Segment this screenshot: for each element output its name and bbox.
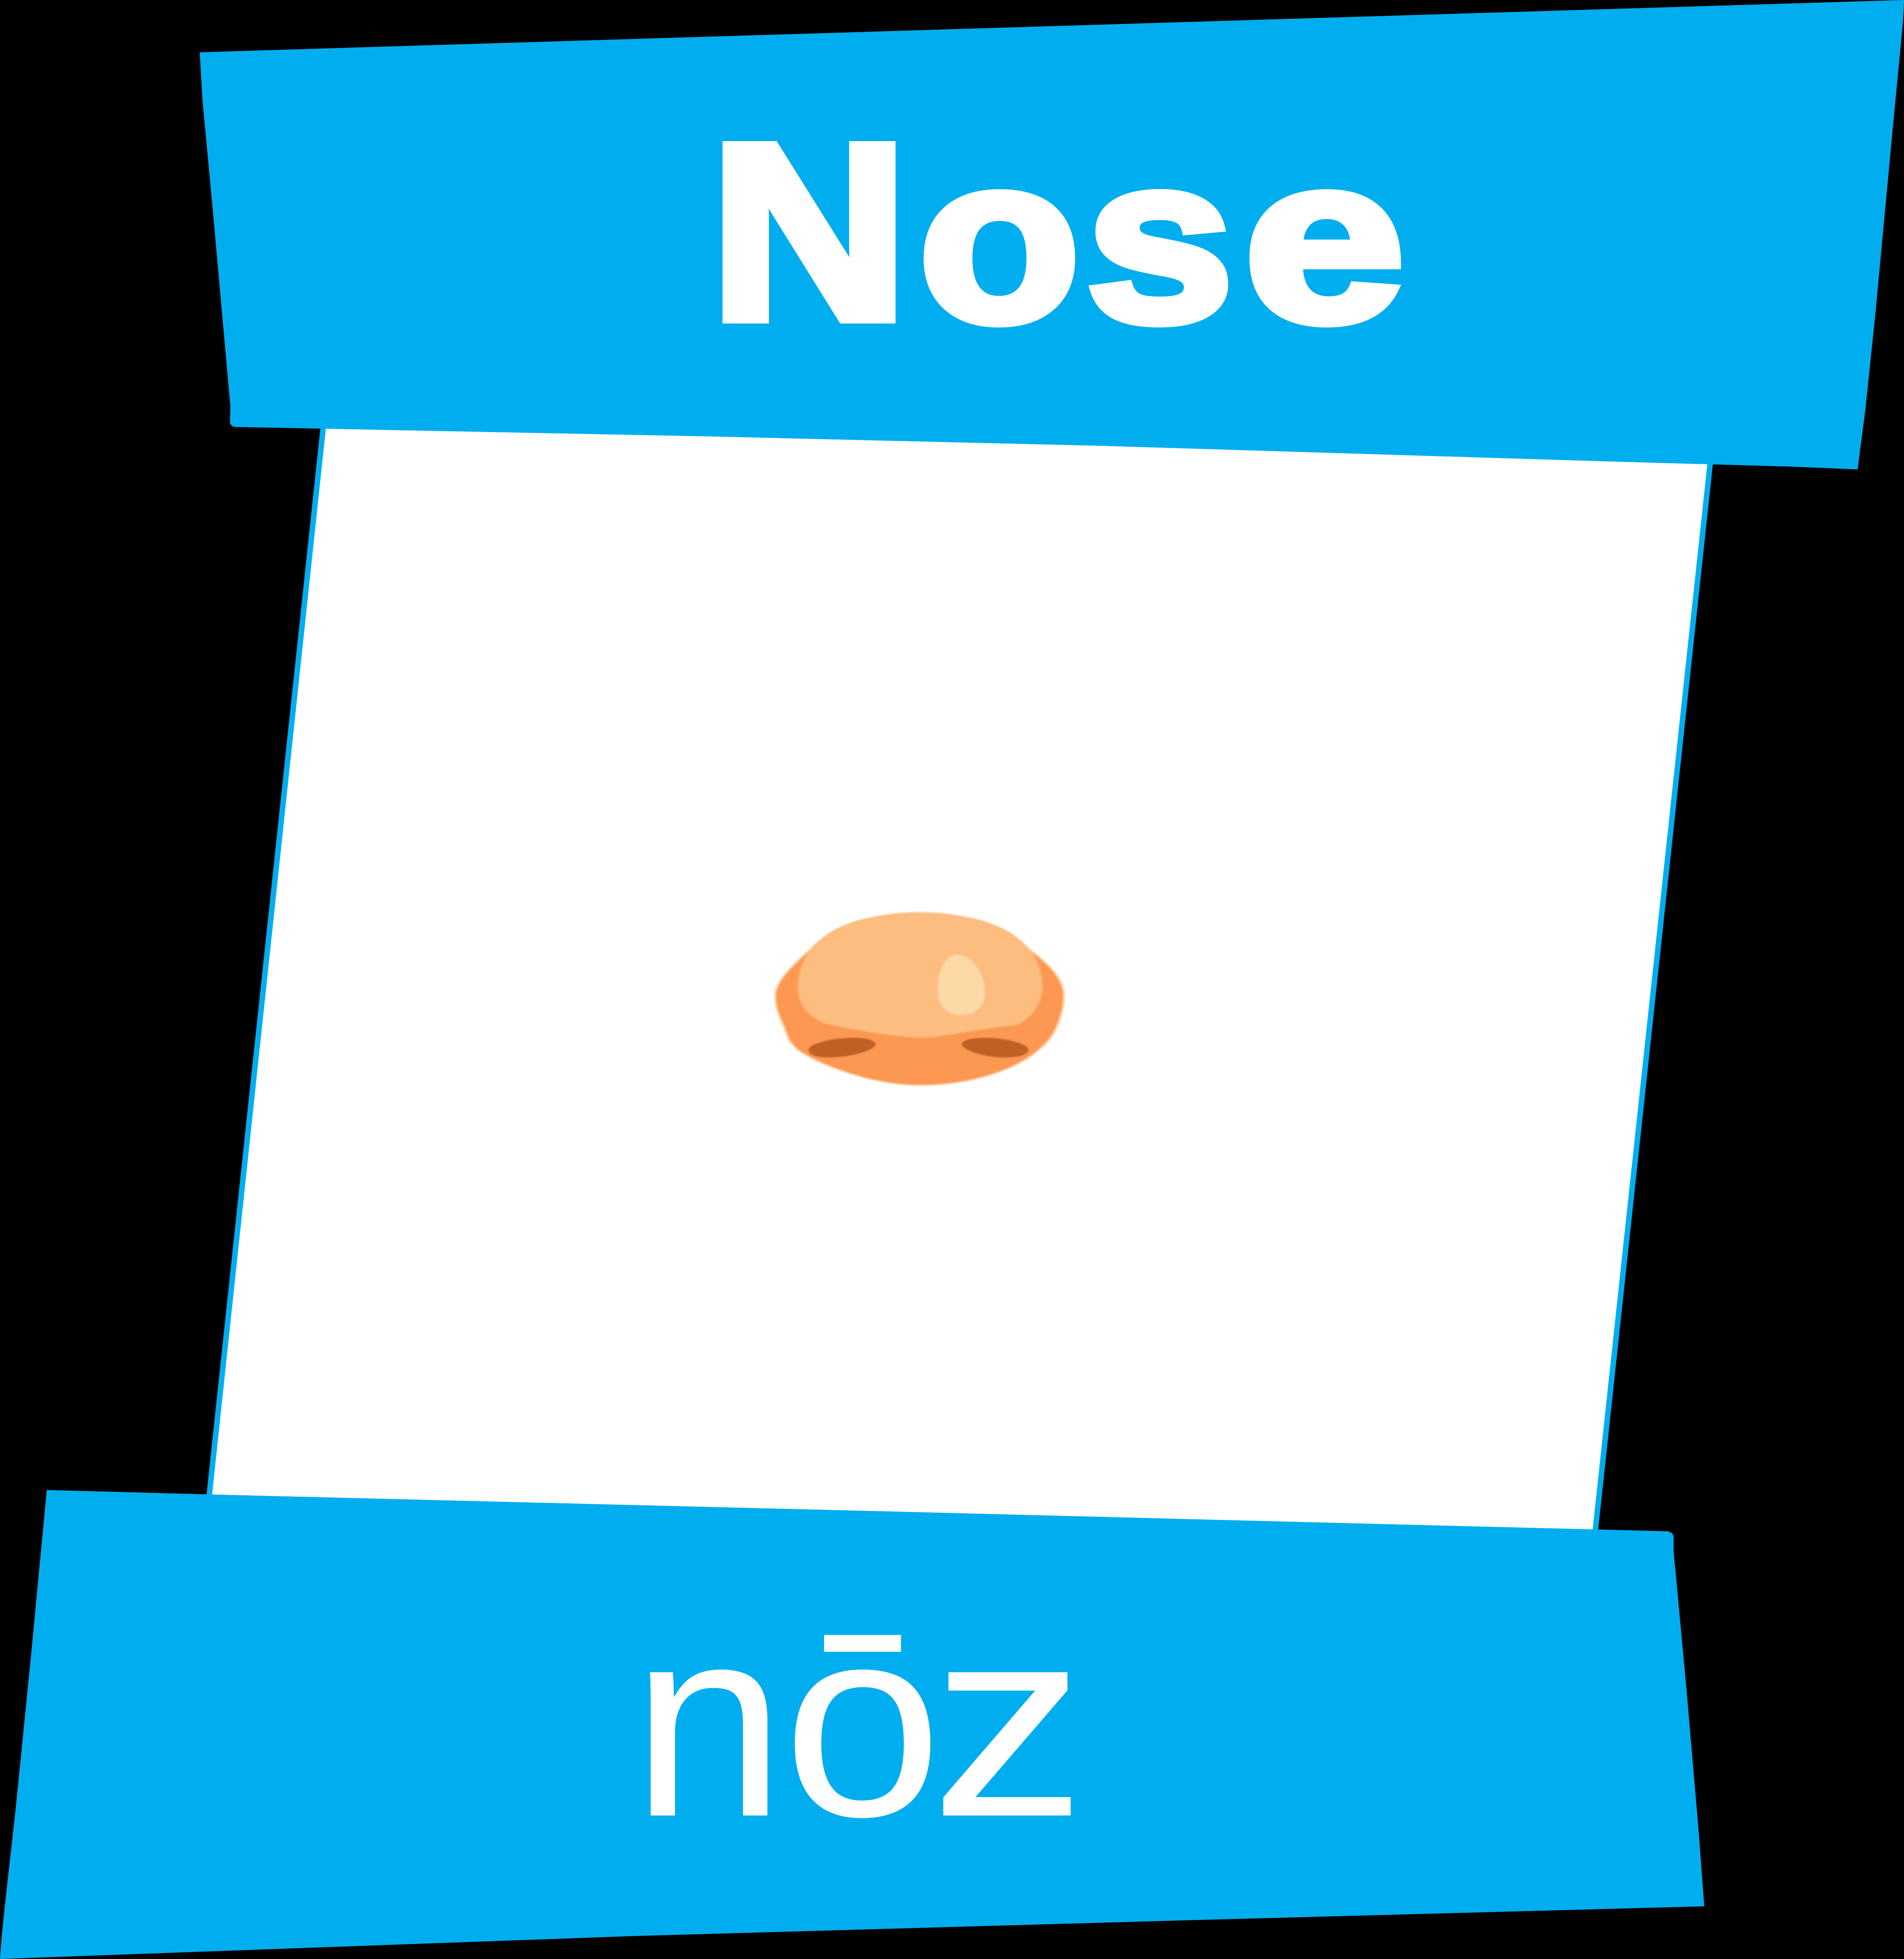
title: e [1244,108,1405,370]
bottom banner [0,1490,1704,1959]
pronunciation: ō [783,1570,942,1873]
title: o [919,108,1080,370]
top banner [200,0,1904,469]
panel: white card [209,421,1711,1537]
top banner shape [200,0,1904,469]
nose highlight [938,955,985,1015]
left nostril [808,1038,876,1058]
right nostril [962,1038,1028,1058]
pronunciation [631,1570,1086,1873]
pronunciation: z [931,1570,1086,1873]
bottom banner shape [0,1490,1704,1959]
title [710,92,1405,372]
icon: nose [775,912,1064,1085]
title: N [710,92,909,372]
title: s [1086,108,1234,370]
nose bridge [798,913,1043,1038]
nose base [775,912,1064,1085]
pronunciation: n [631,1570,786,1873]
